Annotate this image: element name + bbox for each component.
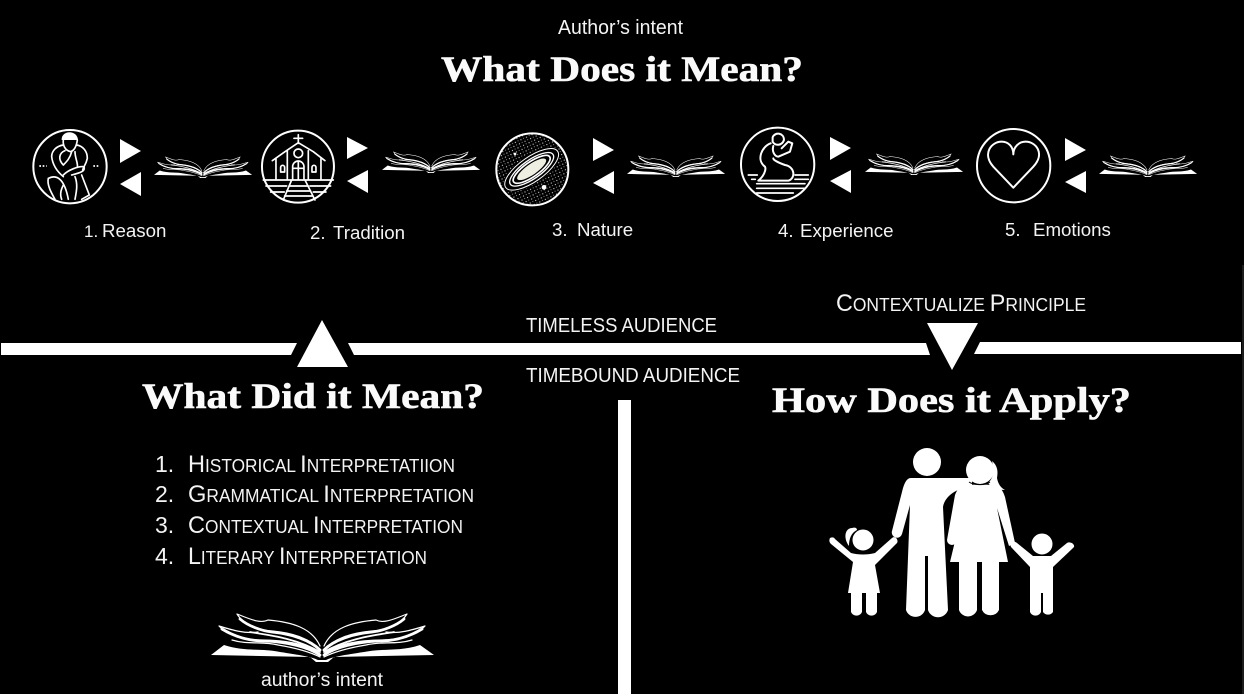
caption: author's intent: author’s intent	[261, 670, 384, 691]
icon: open book	[1099, 156, 1197, 177]
boy	[1010, 542, 1074, 616]
icon: galaxy in circle	[496, 133, 568, 205]
mother	[947, 484, 1015, 616]
heading: what did it mean: What Did it Mean?	[142, 376, 484, 416]
step 5: emotions	[977, 129, 1197, 240]
item 1: HISTORICAL INTERPRETATIION	[188, 451, 455, 478]
item 3: CONTEXTUAL INTERPRETATION	[188, 512, 463, 539]
label: 3. nature: 3.	[552, 219, 568, 240]
icon: open book	[382, 152, 480, 173]
item 2: GRAMMATICAL INTERPRETATION	[188, 481, 474, 508]
arrow: forward	[120, 139, 141, 163]
arrow: forward	[347, 137, 368, 159]
label: 1. reason: 1.	[84, 222, 98, 241]
arrow: down triangle	[927, 323, 978, 370]
step 2: tradition	[262, 131, 480, 243]
item 4: 4.	[155, 543, 174, 569]
icon: praying figure in circle	[741, 128, 814, 201]
subtitle: author's intent: Author’s intent	[558, 17, 683, 39]
arrow: back	[830, 170, 851, 193]
label: 5. emotions: Emotions	[1033, 219, 1111, 240]
arrow: back	[347, 170, 368, 193]
step 1: reason	[33, 130, 252, 241]
horizontal divider left	[1, 343, 297, 355]
arrow: up triangle	[297, 320, 348, 367]
arrow: forward	[1065, 138, 1086, 161]
icon: open book	[154, 157, 252, 178]
item 4: LITERARY INTERPRETATION	[188, 543, 427, 570]
item 1: 1.	[155, 451, 174, 477]
icon: heart in circle	[977, 129, 1050, 202]
label: 2. tradition: 2.	[310, 222, 326, 243]
icon: family	[829, 448, 1074, 617]
label: 2. tradition: Tradition	[333, 222, 405, 243]
right edge line	[1242, 265, 1244, 694]
icon: church in circle	[262, 131, 334, 203]
step 3: nature	[496, 133, 725, 240]
heading: how does it apply: How Does it Apply?	[772, 380, 1131, 420]
label: 3. nature: Nature	[577, 219, 633, 240]
icon: open book	[627, 156, 725, 177]
step 4: experience	[741, 128, 963, 241]
item 2: 2.	[155, 481, 174, 507]
label: 5. emotions: 5.	[1005, 219, 1021, 240]
icon: thinker in circle	[33, 130, 107, 203]
horizontal divider middle	[348, 343, 930, 355]
label: 4. experience: 4.	[778, 220, 794, 241]
interpretation list	[155, 451, 474, 570]
label: timebound audience: TIMEBOUND AUDIENCE	[526, 365, 740, 387]
title: what does it mean: What Does it Mean?	[441, 49, 803, 89]
item 3: 3.	[155, 512, 174, 538]
girl	[829, 537, 898, 616]
father	[892, 478, 972, 617]
horizontal divider right	[974, 342, 1241, 354]
arrow: back	[120, 172, 141, 196]
arrow: forward	[830, 137, 851, 160]
label: 4. experience: Experience	[800, 220, 894, 241]
label: timeless audience: TIMELESS AUDIENCE	[526, 315, 717, 337]
arrow: back	[593, 171, 614, 194]
vertical divider	[618, 400, 631, 694]
arrow: back	[1065, 171, 1086, 193]
icon: open book	[865, 154, 963, 175]
label: contextualize principle: CONTEXTUALIZE PRINCIPLE	[836, 290, 1086, 317]
arrow: forward	[593, 138, 614, 161]
icon: large open book	[211, 614, 434, 662]
label: 1. reason: Reason	[102, 220, 166, 241]
